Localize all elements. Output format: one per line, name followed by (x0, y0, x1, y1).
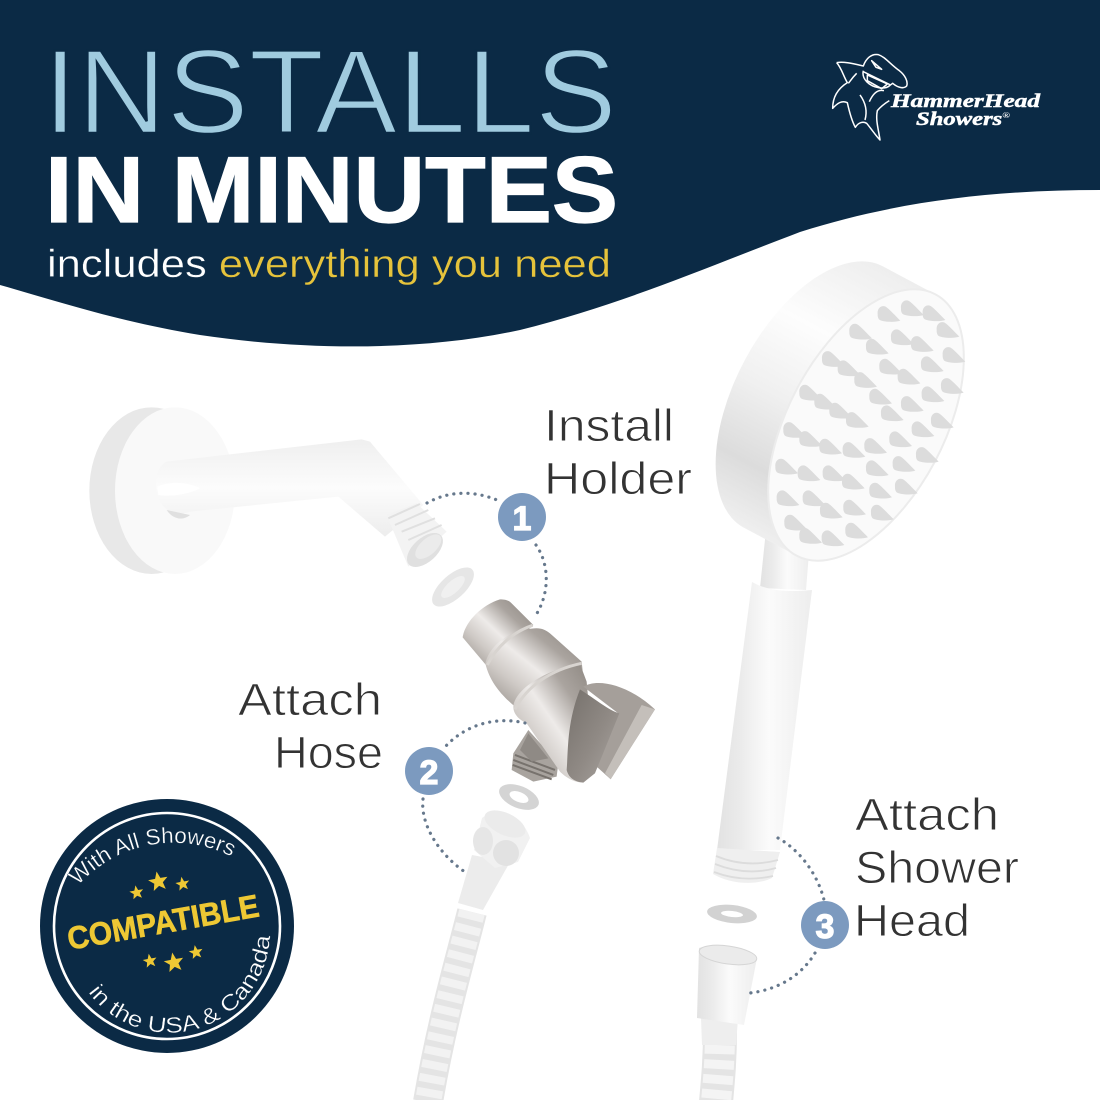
product: shower head (675, 230, 1004, 883)
step badge 3: 3 (816, 908, 834, 946)
hex nut (474, 813, 530, 868)
hose sleeve (458, 855, 510, 910)
nozzles (775, 300, 965, 546)
logo: HammerHead Showers (833, 54, 1041, 140)
thread (713, 848, 780, 883)
label: Attach Hose: Attach (238, 674, 382, 725)
dotted connector 1 (427, 493, 546, 618)
label: Attach Hose: Hose (274, 727, 383, 778)
label: Install Holder: Install (544, 400, 674, 451)
face (728, 258, 1004, 592)
washer 2 (495, 779, 543, 815)
clip front face (567, 689, 619, 783)
step badge 1 (498, 493, 546, 541)
header wave banner (0, 0, 1100, 346)
product: lower hose connector (697, 942, 758, 1100)
hose ribs (428, 912, 472, 1100)
product: shower arm (89, 407, 449, 574)
product: hose from holder (428, 805, 530, 1100)
flange (89, 407, 235, 574)
title: IN MINUTES: IN MINUTES (45, 137, 618, 242)
step badge 1: 1 (513, 500, 531, 538)
label: Attach Shower Head: Attach (855, 789, 999, 840)
dotted connector 2 (423, 721, 525, 872)
outlet with threads (512, 730, 558, 782)
icon: shark outline (833, 54, 907, 140)
washer 3 (706, 902, 758, 926)
head body and face (675, 230, 1004, 592)
logo wordmark Showers: Showers (916, 109, 983, 130)
badge text bottom: in the USA & Canada (89, 936, 270, 1033)
label: Attach Shower Head: Shower (855, 842, 1019, 893)
label: Attach Shower Head (854, 789, 1019, 946)
label: Attach Hose (238, 674, 383, 778)
step badge 2 (405, 747, 453, 795)
neck (760, 530, 810, 590)
lower body (513, 664, 595, 783)
compatibility badge (40, 799, 294, 1053)
arm tube (156, 439, 423, 537)
label: Attach Shower Head: Head (854, 895, 970, 946)
badge text top: With All Showers (67, 827, 234, 882)
threaded end (387, 503, 449, 573)
clip recess (583, 683, 655, 779)
collar (701, 1018, 738, 1045)
mid cylinder (485, 628, 583, 707)
product: brushed metal holder (463, 599, 655, 783)
label: Install Holder (544, 400, 692, 504)
logo wordmark HammerHead: HammerHead (890, 91, 1041, 112)
label: Install Holder: Holder (544, 453, 692, 504)
ridges (487, 625, 582, 709)
sleeve (717, 582, 812, 850)
dotted connector 3 (750, 838, 824, 993)
badge stars (129, 870, 204, 973)
body of head (675, 230, 935, 556)
subtitle: includes everything you need (47, 243, 611, 286)
connector cone (697, 946, 757, 1025)
washer 1 (426, 561, 480, 613)
logo wordmark Showers: ® (1002, 111, 1010, 120)
lower hose ribs (716, 1030, 720, 1100)
step badge 3 (801, 901, 849, 949)
title: INSTALLS: INSTALLS (43, 25, 617, 159)
top cylinder (463, 599, 533, 667)
step badge 2: 2 (420, 754, 438, 792)
badge text compatible: COMPATIBLE (64, 888, 262, 957)
